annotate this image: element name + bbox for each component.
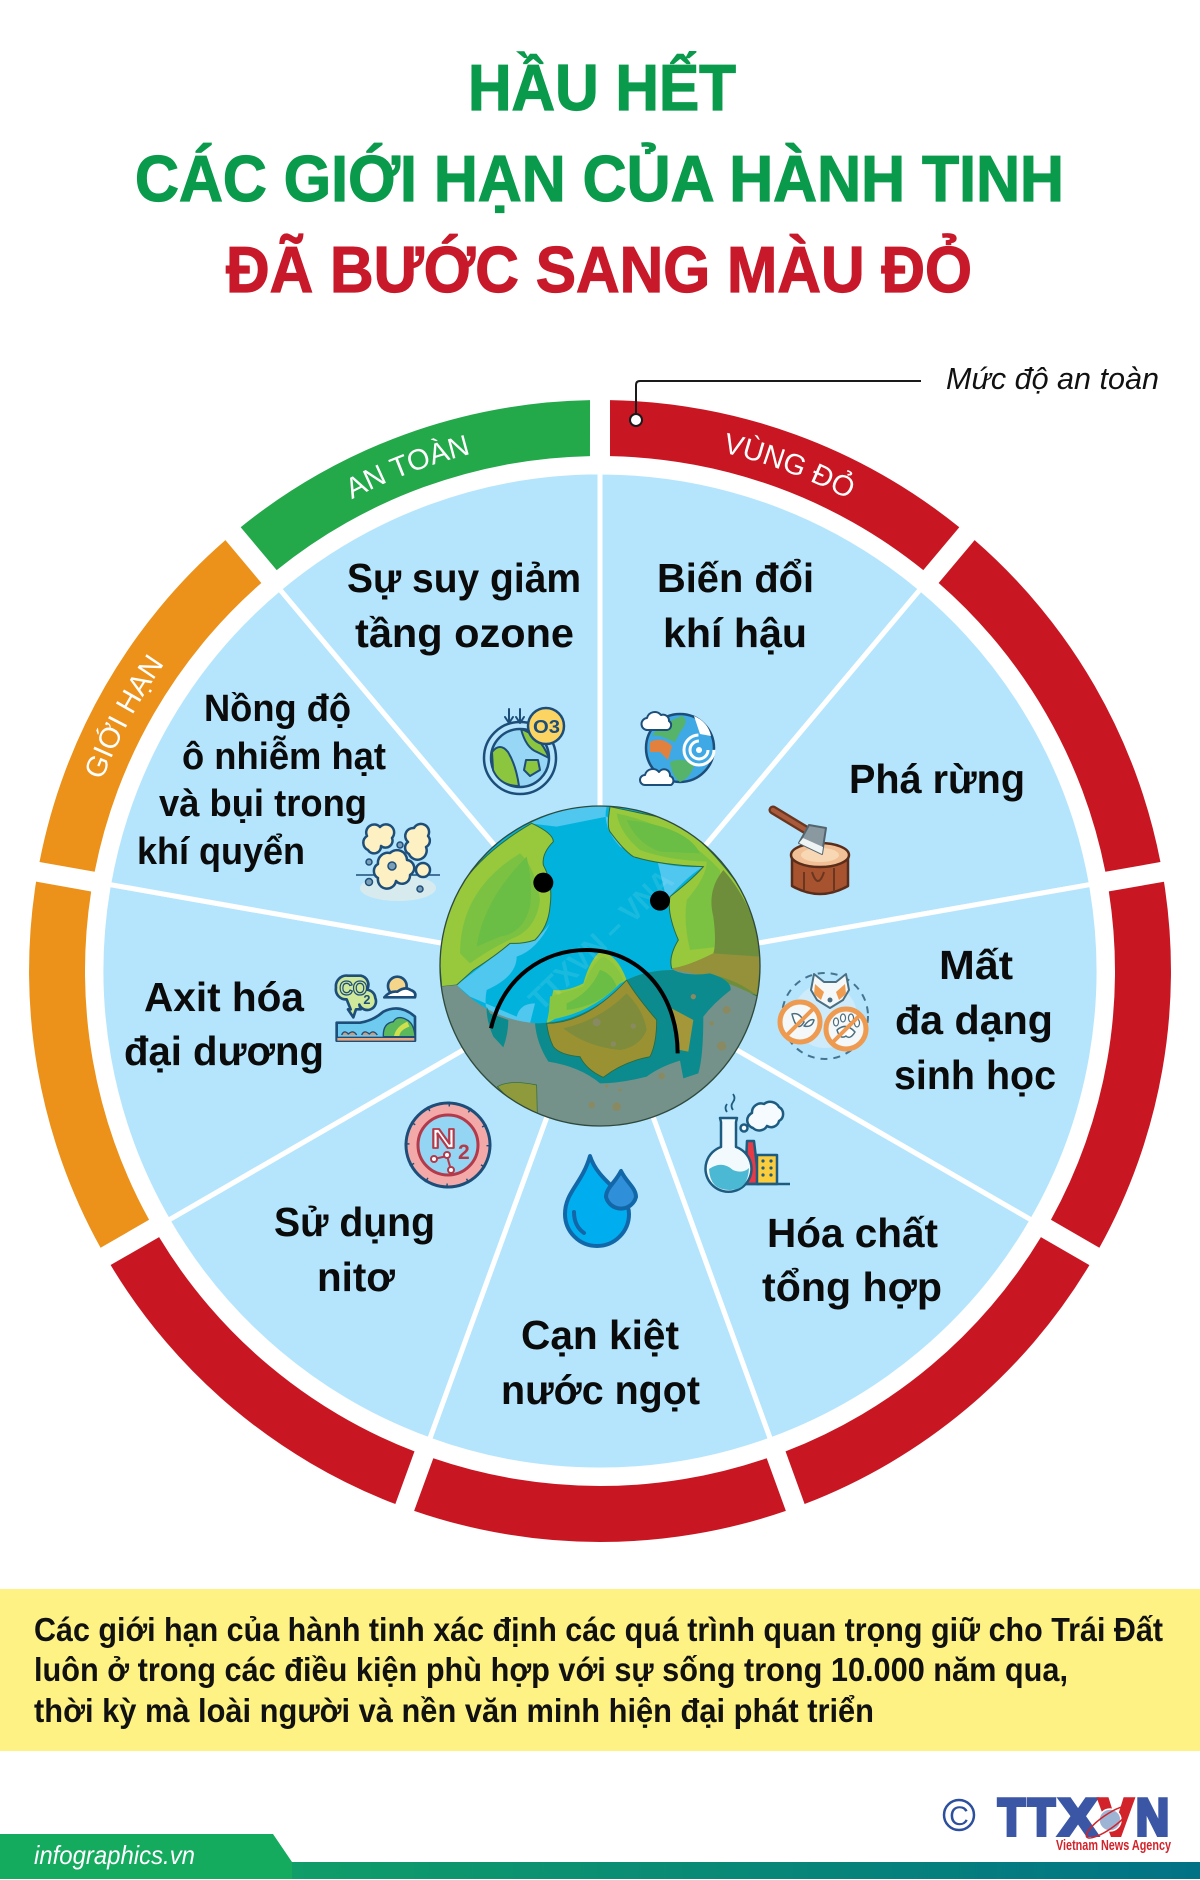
globe with sad face — [433, 806, 763, 1130]
icon: ocean acidification: 2 — [363, 993, 370, 1007]
pollution spots — [588, 994, 731, 1111]
sector label: ozone depletion: Sự suy giảm — [347, 555, 581, 601]
land: left continent — [440, 823, 553, 987]
ring segment: orange 2 — [40, 518, 268, 892]
blue sector wheel — [7, 383, 1166, 1550]
polluted small islands — [672, 1008, 694, 1052]
sector label: biodiversity loss: đa dạng — [895, 997, 1053, 1043]
title — [135, 51, 1064, 306]
icon: nitrogen: N — [431, 1123, 456, 1154]
ring labels: VÙNG ĐỎ — [727, 432, 854, 496]
icon: axe and stump — [773, 810, 849, 894]
icon: climate earth — [640, 712, 714, 785]
eye right — [650, 891, 670, 911]
sector label: biodiversity loss: sinh học — [894, 1052, 1056, 1098]
icon: ocean acidification — [336, 976, 415, 1041]
sector label: freshwater depletion: Cạn kiệt — [521, 1312, 679, 1358]
logo: TTXVN: T — [998, 1789, 1025, 1847]
sector label: aerosol pollution: và bụi trong — [159, 783, 367, 825]
sector label: aerosol pollution — [137, 688, 386, 873]
land: center island top — [547, 952, 627, 1023]
sector label: nitrogen use: nitơ — [317, 1254, 396, 1300]
sector label: ozone depletion: tầng ozone — [355, 610, 574, 656]
ring labels: GIỚI HẠN — [86, 654, 164, 776]
icon: chemical flask and factory — [706, 1094, 790, 1192]
ring segment: red 6 — [67, 1225, 453, 1504]
ring segment: red 4 — [768, 1180, 1089, 1568]
footer band: infographics.vn — [34, 1840, 195, 1870]
polluted lower region — [433, 970, 763, 1130]
sector label: nitrogen use — [274, 1199, 435, 1300]
copyright mark — [944, 1800, 974, 1831]
description box: thời kỳ mà loài người và nền văn minh hiện đại phát triển — [34, 1692, 874, 1729]
sector label: aerosol pollution: khí quyển — [137, 831, 305, 873]
sad mouth — [491, 950, 678, 1053]
sector label: ocean acidification: đại dương — [124, 1028, 324, 1074]
polluted deep water — [535, 970, 731, 1083]
sector label: climate change: khí hậu — [663, 610, 807, 656]
icon: ocean acidification: CO — [339, 977, 367, 1000]
logo: TTXVN: N — [1136, 1789, 1169, 1847]
sector label: aerosol pollution: Nồng độ — [204, 688, 351, 730]
ring labels: AN TOÀN — [350, 435, 469, 500]
icon: ozone earth: O3 — [533, 717, 560, 737]
icon: nitrogen: 2 — [458, 1141, 470, 1164]
description box — [0, 1589, 1200, 1751]
title: CÁC GIỚI HẠN CỦA HÀNH TINH — [135, 142, 1064, 215]
polluted center island — [547, 980, 657, 1077]
sector label: biodiversity loss: Mất — [939, 942, 1013, 988]
sector label: synthetic chemicals — [762, 1210, 942, 1310]
footer band — [0, 1834, 1200, 1879]
ring segment: red 1 — [610, 400, 959, 570]
sector label: deforestation: Phá rừng — [849, 756, 1025, 802]
safety level callout: Mức độ an toàn — [946, 361, 1159, 396]
title: ĐÃ BƯỚC SANG MÀU ĐỎ — [226, 233, 972, 306]
sector label: aerosol pollution: ô nhiễm hạt — [182, 734, 386, 778]
icon: nitrogen — [406, 1103, 490, 1187]
ring segment: red 2 — [865, 540, 1200, 895]
safety level callout — [630, 361, 1159, 426]
sector label: freshwater depletion: nước ngọt — [501, 1367, 700, 1413]
icon: water drops — [565, 1156, 636, 1246]
icon: dust particles — [356, 824, 440, 901]
land: right continent — [608, 807, 763, 997]
watermark: TTXVN – VNA — [522, 863, 680, 1017]
ring segment: red 3 — [997, 882, 1200, 1255]
sector label: synthetic chemicals: Hóa chất — [767, 1210, 938, 1256]
icon: ozone earth — [484, 708, 564, 794]
eye left — [533, 873, 553, 893]
sector label: nitrogen use: Sử dụng — [274, 1199, 435, 1245]
sector label: ocean acidification — [124, 974, 324, 1074]
sector label: biodiversity loss — [894, 942, 1056, 1098]
outer ring of safety levels — [29, 380, 1171, 1542]
ring segment: orange 1 — [0, 860, 248, 1248]
logo: TTXVN: T — [1028, 1789, 1055, 1847]
logo: TTXVN: X — [1059, 1789, 1097, 1847]
globe outline — [440, 806, 760, 1126]
sector label: freshwater depletion — [501, 1312, 700, 1413]
ring segment: green — [241, 303, 618, 657]
sector label: ozone depletion — [347, 555, 581, 656]
ocean — [457, 806, 756, 1024]
sector label: synthetic chemicals: tổng hợp — [762, 1264, 942, 1310]
description box: luôn ở trong các điều kiện phù hợp với sự sống trong 10.000 năm qua, — [34, 1651, 1068, 1688]
sector label: ocean acidification: Axit hóa — [144, 974, 305, 1020]
ring labels — [86, 432, 854, 776]
logo: TTXVN: V — [1099, 1789, 1133, 1847]
icon: biodiversity — [780, 973, 868, 1059]
sector label: climate change — [657, 555, 814, 656]
title: HẦU HẾT — [468, 51, 736, 124]
sector label: climate change: Biến đổi — [657, 555, 814, 601]
ring segment: red 5 — [399, 1351, 786, 1630]
copyright mark: C — [949, 1801, 969, 1831]
logo: TTXVN — [998, 1789, 1171, 1854]
